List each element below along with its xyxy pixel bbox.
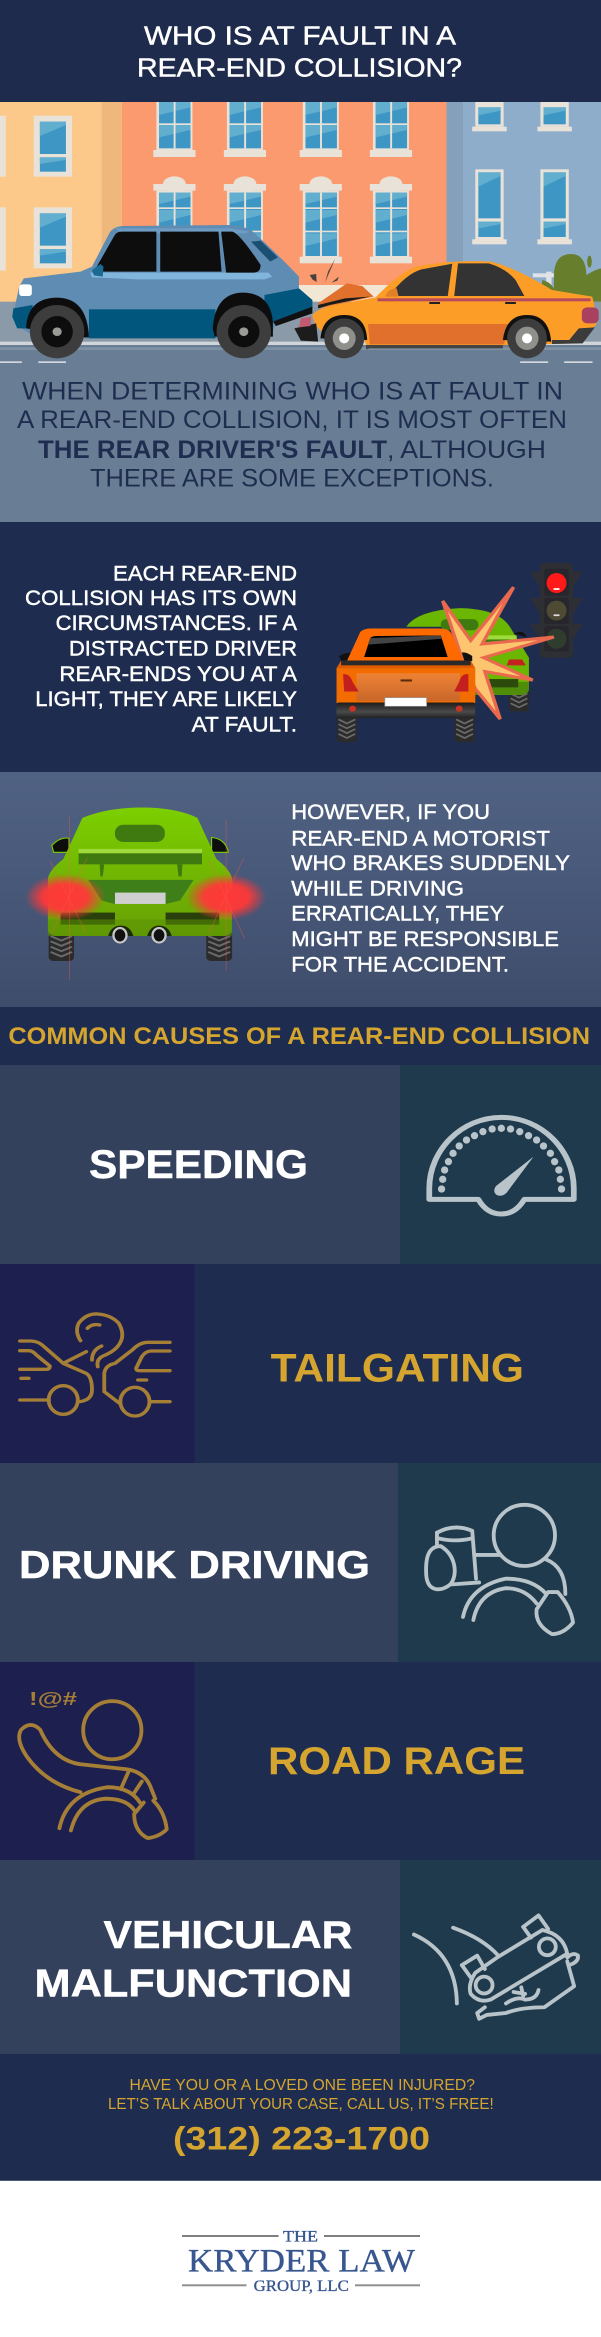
logo: The Kryder Law Group: KRYDER LAW <box>188 2244 416 2280</box>
icon: angry driver: !@# <box>29 1689 77 1709</box>
intro text: A REAR-END COLLISION, IT IS MOST OFTEN <box>17 406 567 434</box>
panel: speeding <box>0 1065 601 1264</box>
icon: traffic light <box>530 563 583 658</box>
CTA text: LET’S TALK ABOUT YOUR CASE, CALL US, IT’S FREE! <box>108 2096 494 2113</box>
impact marks <box>310 258 339 283</box>
label: tailgating: TAILGATING <box>271 1347 524 1391</box>
icon: drunk driver <box>426 1505 573 1634</box>
panel: drunk driving <box>0 1463 601 1662</box>
icon: speedometer <box>429 1117 574 1214</box>
green car struck <box>406 608 529 711</box>
logo: The Kryder Law Group: THE <box>283 2229 318 2246</box>
icon: overturned car <box>414 1915 578 2019</box>
intro text: WHEN DETERMINING WHO IS AT FAULT IN <box>22 378 563 406</box>
text: sudden braking: MIGHT BE RESPONSIBLE <box>291 927 559 951</box>
panel: vehicular malfunction <box>0 1860 601 2054</box>
CTA text: HAVE YOU OR A LOVED ONE BEEN INJURED? <box>130 2077 475 2094</box>
panel: distracted driver <box>0 522 601 772</box>
illustration: pickup hitting green car at traffic light <box>337 563 583 742</box>
icon: crashing cars <box>20 1314 170 1416</box>
street illustration <box>0 102 601 522</box>
intro text: THE REAR DRIVER'S FAULT <box>38 436 387 464</box>
logo: The Kryder Law Group: GROUP, LLC <box>254 2278 349 2295</box>
text: distracted driver: DISTRACTED DRIVER <box>69 636 297 660</box>
label: road rage: ROAD RAGE <box>268 1740 525 1783</box>
intro text: THERE ARE SOME EXCEPTIONS. <box>90 465 494 493</box>
phone number: (312) 223-1700 <box>173 2120 430 2156</box>
logo: The Kryder Law Group <box>182 2229 420 2295</box>
title <box>137 20 462 83</box>
panel: sudden braking <box>0 772 601 1007</box>
heading: common causes <box>0 1007 601 1065</box>
text: sudden braking: ERRATICALLY, THEY <box>291 902 504 926</box>
panel: street scene with collision <box>0 102 601 522</box>
text: distracted driver: CIRCUMSTANCES. IF A <box>56 611 298 635</box>
text: sudden braking: WHILE DRIVING <box>291 876 464 900</box>
text: sudden braking: FOR THE ACCIDENT. <box>291 952 509 976</box>
text: distracted driver: REAR-ENDS YOU AT A <box>59 662 298 686</box>
label: vehicular malfunction: VEHICULAR <box>104 1914 352 1957</box>
intro text: , ALTHOUGH <box>387 436 546 464</box>
text: sudden braking: HOWEVER, IF YOU <box>291 800 490 824</box>
header panel <box>0 0 601 102</box>
panel: road rage <box>0 1662 601 1860</box>
intro text <box>17 378 567 493</box>
orange pickup <box>337 628 475 742</box>
text: distracted driver: LIGHT, THEY ARE LIKELY <box>35 687 297 711</box>
text: distracted driver: EACH REAR-END <box>113 561 297 585</box>
title: WHO IS AT FAULT IN A <box>144 20 457 50</box>
text: distracted driver: AT FAULT. <box>192 712 297 736</box>
text: distracted driver: COLLISION HAS ITS OWN <box>25 586 297 610</box>
icon: angry driver <box>19 1689 167 1838</box>
heading: common causes: COMMON CAUSES OF A REAR-END COLLISION <box>8 1023 590 1050</box>
label: vehicular malfunction: MALFUNCTION <box>34 1962 352 2006</box>
label: vehicular malfunction <box>34 1914 352 2006</box>
orange car <box>294 261 599 358</box>
CTA text <box>108 2077 494 2113</box>
icon: impact starburst <box>443 587 554 719</box>
title: REAR-END COLLISION? <box>137 53 462 83</box>
blue SUV <box>12 225 312 358</box>
text: sudden braking: WHO BRAKES SUDDENLY <box>291 851 570 875</box>
footer call to action <box>0 2054 601 2181</box>
green car with brake lights <box>25 808 266 980</box>
text: sudden braking: REAR-END A MOTORIST <box>291 826 550 850</box>
brake light glow <box>25 816 266 980</box>
text: sudden braking <box>291 800 570 976</box>
panel: tailgating <box>0 1264 601 1463</box>
label: drunk driving: DRUNK DRIVING <box>19 1544 370 1587</box>
label: speeding: SPEEDING <box>89 1143 308 1187</box>
text: distracted driver <box>25 561 298 736</box>
